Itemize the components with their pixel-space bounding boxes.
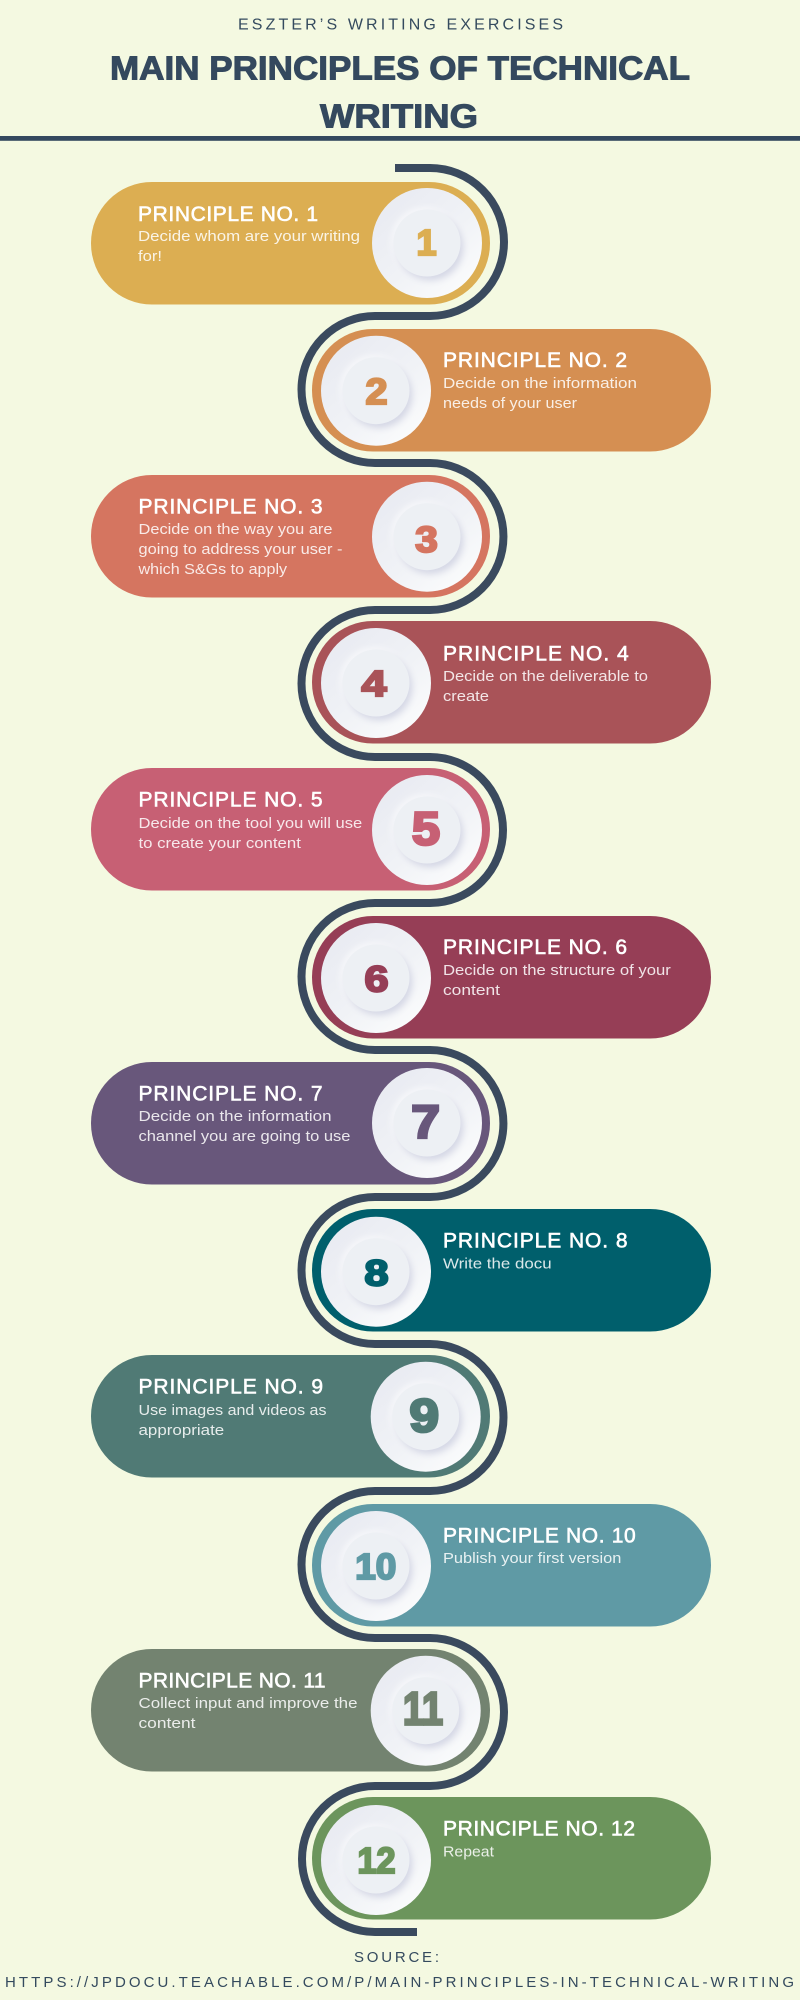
description	[443, 375, 637, 412]
description: Repeat	[443, 1844, 495, 1861]
title: MAIN PRINCIPLES OF TECHNICAL	[110, 49, 690, 86]
heading: PRINCIPLE NO. 11	[138, 1669, 326, 1692]
icon: number disc 5: 5	[412, 802, 440, 854]
description: to create your content	[138, 835, 302, 852]
icon: number disc 7	[372, 1068, 482, 1178]
description	[138, 1695, 358, 1732]
pill	[91, 182, 490, 304]
icon: number disc 11	[371, 1656, 481, 1766]
description: for!	[138, 248, 162, 265]
icon: number disc 12	[321, 1805, 431, 1915]
pill	[91, 1649, 490, 1772]
pill	[312, 329, 711, 452]
heading: PRINCIPLE NO. 9	[138, 1376, 323, 1399]
pill	[91, 768, 490, 890]
arrow: serpentine connector path	[302, 168, 504, 1932]
icon: number disc 1: 1	[416, 222, 437, 263]
description: Write the docu	[443, 1256, 552, 1273]
pill	[91, 1355, 490, 1478]
description	[443, 668, 648, 705]
icon: number disc 4	[321, 628, 431, 738]
icon: number disc 6: 6	[364, 958, 388, 1000]
panel: principle 4	[312, 621, 711, 744]
heading: PRINCIPLE NO. 5	[138, 789, 322, 812]
panel: principle 9	[91, 1355, 490, 1478]
description: Decide on the structure of your	[443, 962, 671, 979]
icon: number disc 3: 3	[415, 519, 438, 560]
pill	[312, 916, 711, 1038]
title: WRITING	[320, 98, 478, 134]
icon: number disc 11: 11	[403, 1682, 443, 1734]
icon: number disc 5	[372, 775, 482, 885]
pill	[91, 1062, 490, 1184]
panel: principle 5	[91, 768, 490, 890]
icon: number disc 7: 7	[411, 1096, 440, 1148]
heading: PRINCIPLE NO. 2	[443, 349, 627, 372]
panel: principle 10	[312, 1504, 711, 1626]
icon: number disc 1	[372, 188, 482, 298]
panel: principle 2	[312, 329, 711, 452]
icon: number disc 10: 10	[355, 1546, 396, 1587]
icon: number disc 10	[321, 1511, 431, 1621]
icon: number disc 8: 8	[364, 1252, 388, 1294]
pill	[312, 621, 711, 744]
panel: principle 1	[91, 182, 490, 304]
description: which S&Gs to apply	[137, 561, 288, 578]
heading: PRINCIPLE NO. 4	[443, 643, 629, 666]
title	[110, 49, 690, 134]
description	[138, 1108, 350, 1145]
heading: PRINCIPLE NO. 7	[138, 1083, 322, 1106]
icon: number disc 9: 9	[410, 1390, 439, 1442]
panel: principle 8	[312, 1209, 711, 1332]
description: Collect input and improve the	[138, 1695, 358, 1712]
description: Decide on the information	[138, 1108, 332, 1125]
heading: PRINCIPLE NO. 8	[443, 1229, 628, 1252]
description: Publish your first version	[443, 1550, 621, 1567]
title rule	[0, 136, 800, 141]
panel: principle 12	[312, 1797, 711, 1920]
description	[138, 815, 362, 852]
description: Decide on the way you are	[138, 521, 332, 538]
description: going to address your user -	[138, 541, 342, 558]
heading: PRINCIPLE NO. 10	[443, 1525, 636, 1548]
description	[138, 228, 360, 265]
description: appropriate	[138, 1422, 224, 1439]
icon: number disc 12: 12	[358, 1840, 396, 1881]
header label: ESZTER’S WRITING EXERCISES	[238, 16, 563, 33]
description: Decide whom are your writing	[138, 228, 360, 245]
icon: number disc 4: 4	[362, 663, 386, 704]
description: Decide on the information	[443, 375, 637, 392]
panel: principle 7	[91, 1062, 490, 1184]
description: Decide on the deliverable to	[443, 668, 648, 685]
description: channel you are going to use	[138, 1128, 350, 1145]
description: Use images and videos as	[138, 1402, 326, 1419]
heading: PRINCIPLE NO. 6	[443, 936, 627, 959]
icon: number disc 2: 2	[366, 371, 388, 412]
source label: SOURCE:	[354, 1949, 439, 1966]
description: Decide on the tool you will use	[138, 815, 362, 832]
description: content	[138, 1715, 196, 1732]
description: create	[443, 688, 489, 705]
icon: number disc 6	[321, 923, 431, 1033]
description	[138, 1402, 326, 1439]
pill	[312, 1209, 711, 1332]
icon: number disc 9	[371, 1362, 481, 1472]
pill	[312, 1504, 711, 1626]
heading: PRINCIPLE NO. 12	[443, 1818, 635, 1841]
description: needs of your user	[443, 395, 577, 412]
heading: PRINCIPLE NO. 3	[138, 496, 322, 519]
pill	[312, 1797, 711, 1920]
pill	[91, 475, 490, 598]
panel: principle 3	[91, 475, 490, 598]
icon: number disc 2	[321, 336, 431, 446]
panel: principle 11	[91, 1649, 490, 1772]
heading: PRINCIPLE NO. 1	[138, 203, 318, 226]
icon: number disc 8	[321, 1217, 431, 1327]
description: content	[443, 982, 501, 999]
icon: number disc 3	[372, 482, 482, 592]
source url: HTTPS://JPDOCU.TEACHABLE.COM/P/MAIN-PRINCIPLES-IN-TECHNICAL-WRITING	[5, 1974, 794, 1991]
panel: principle 6	[312, 916, 711, 1038]
description	[137, 521, 342, 578]
description	[443, 962, 671, 999]
